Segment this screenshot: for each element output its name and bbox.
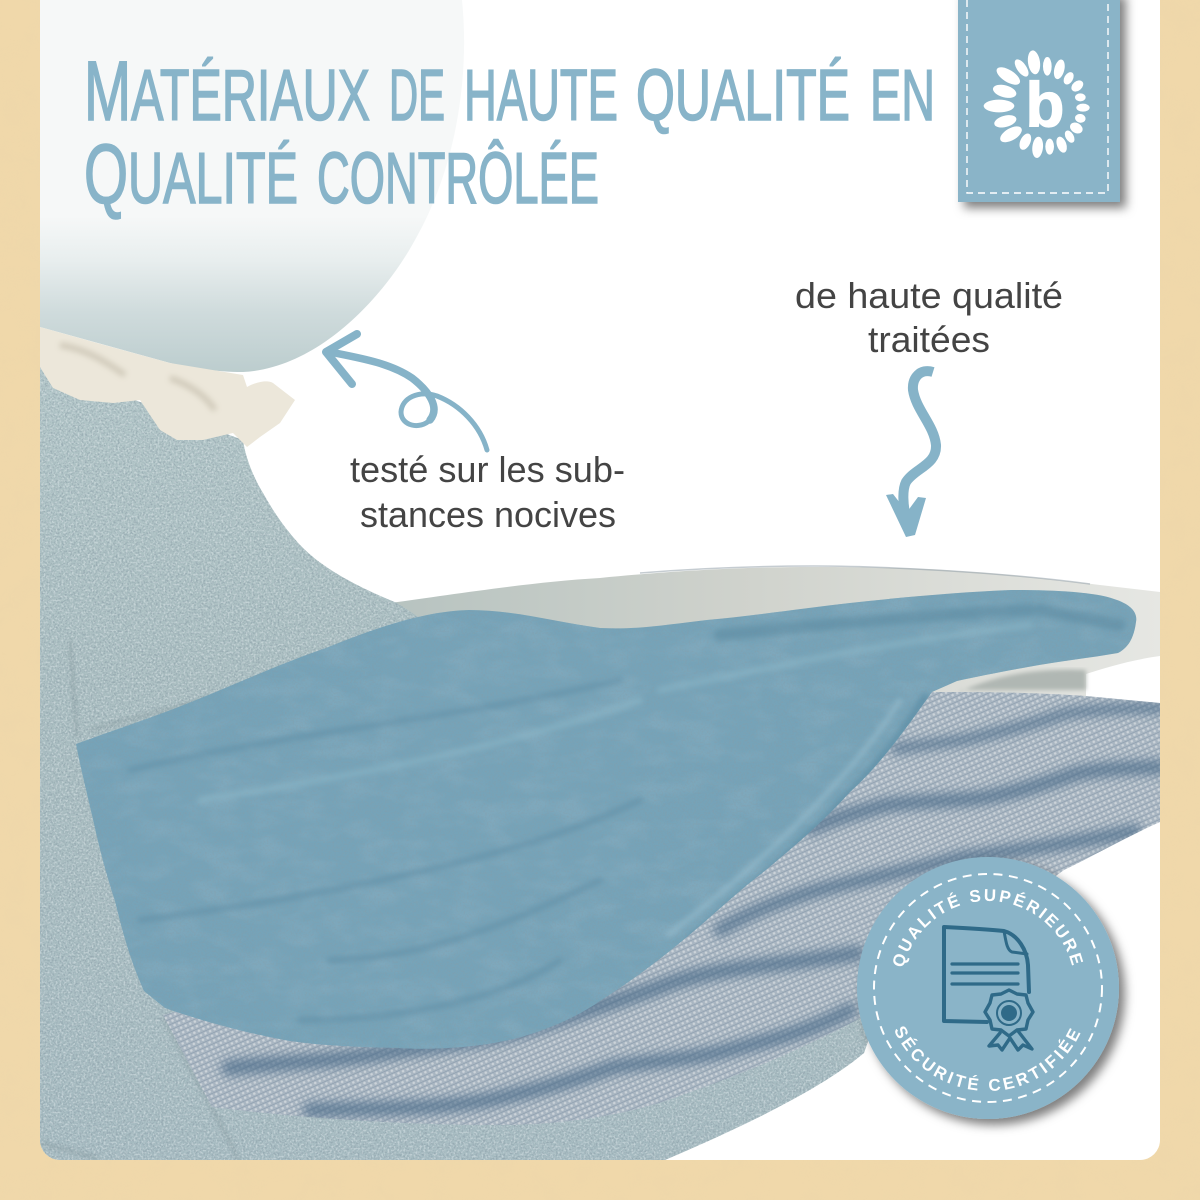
icon: certificate	[944, 927, 1033, 1050]
back wing light band	[390, 566, 1160, 700]
tag stitching	[967, 0, 1108, 193]
title: QUALITÉ	[636, 56, 850, 136]
badge bottom text: SÉCURITÉ CERTIFIÉE	[895, 1026, 1080, 1091]
icon: sun logo	[984, 50, 1090, 158]
title	[84, 44, 935, 221]
arrow: to lace collar	[326, 334, 487, 450]
head	[40, 0, 464, 372]
body	[40, 360, 900, 1160]
label: high quality processed: traitées	[868, 319, 990, 360]
label: tested for harmful substances: testé sur les sub-	[350, 449, 625, 490]
brand tag	[958, 0, 1120, 202]
title: HAUTE	[464, 56, 618, 136]
label: tested for harmful substances: stances nocives	[360, 494, 616, 535]
label: high quality processed: de haute qualité	[795, 275, 1063, 316]
lace collar	[40, 327, 295, 447]
quality badge	[856, 857, 1132, 1132]
title: EN	[870, 56, 935, 136]
arrow: down to wing	[886, 371, 936, 537]
badge dashed ring	[874, 874, 1102, 1102]
badge disc	[857, 857, 1119, 1119]
dark stripes	[229, 708, 1160, 1110]
title: CONTRÔLÉE	[317, 139, 599, 219]
striped wing	[160, 690, 1160, 1130]
title: DE	[389, 56, 445, 136]
icon: sun logo: b	[1026, 71, 1064, 141]
badge top text: QUALITÉ SUPÉRIEURE	[893, 889, 1084, 966]
icon: seal	[985, 990, 1033, 1050]
label: high quality processed	[795, 275, 1063, 360]
fabric wrinkles	[130, 610, 1120, 1020]
blue muslin wing	[70, 585, 1145, 1055]
title: QUALITÉ	[84, 127, 298, 221]
title: MATÉRIAUX	[84, 44, 370, 138]
label: tested for harmful substances	[350, 449, 625, 535]
seams	[41, 640, 239, 1160]
tag body	[958, 0, 1120, 202]
